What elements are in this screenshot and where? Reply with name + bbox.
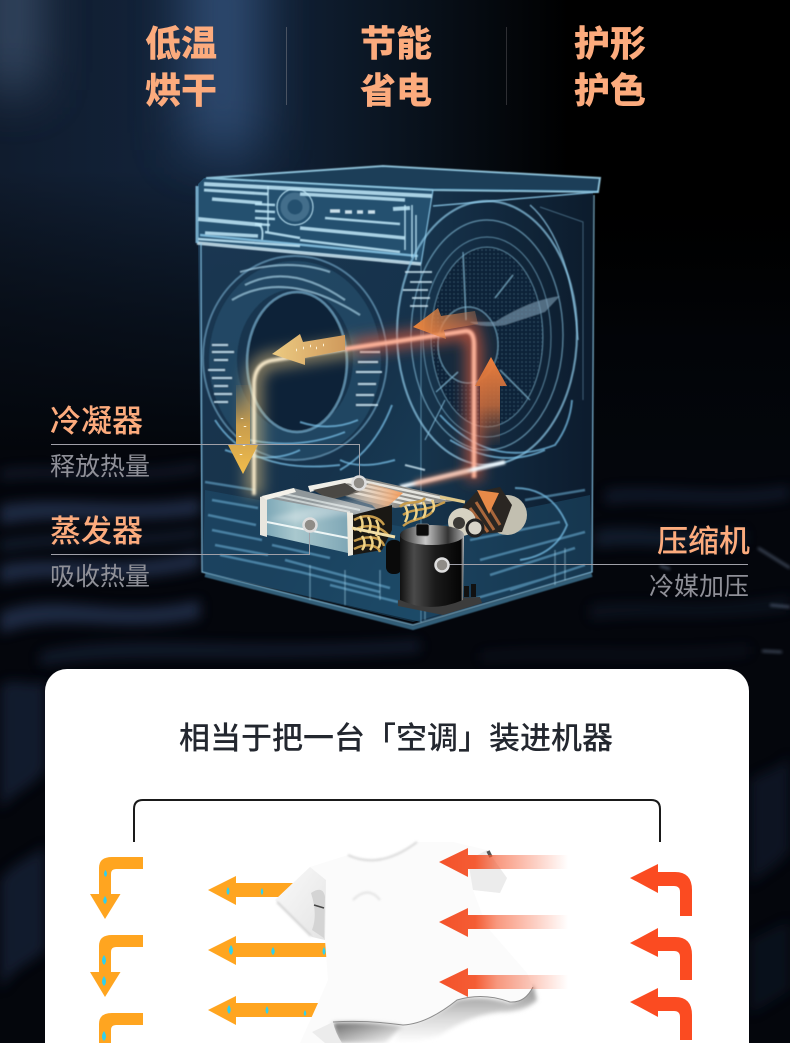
divider left — [286, 27, 287, 105]
airflow glow — [254, 330, 505, 495]
heading: low temp drying: 低温 — [145, 23, 217, 64]
base streaks — [205, 482, 585, 620]
label: condenser: 冷凝器 — [50, 404, 143, 439]
arrow: gold left — [272, 334, 345, 365]
t-shirt — [275, 842, 537, 1043]
door ring — [203, 256, 387, 460]
condenser — [308, 476, 463, 508]
arrow: orange up — [475, 357, 507, 445]
bracket — [134, 800, 660, 842]
heading: shape and colour care: 护色 — [574, 70, 646, 111]
compressor — [386, 524, 482, 615]
lower door and drum reflections — [215, 400, 572, 560]
water drops — [102, 870, 326, 1041]
arrow: orange left — [413, 308, 478, 339]
left sleeve — [275, 867, 326, 940]
heading: low temp drying — [145, 23, 217, 111]
heading: energy saving — [360, 23, 432, 111]
left elbow arrows — [90, 857, 143, 1043]
washer cabinet — [197, 166, 600, 628]
orange exit arrows — [208, 876, 330, 1025]
copper coils — [352, 497, 465, 552]
divider right — [506, 27, 507, 105]
drum — [397, 201, 583, 470]
label: compressor: 压缩机 — [657, 524, 750, 559]
motor / fan — [448, 487, 527, 536]
text: absorbs heat: 吸收热量 — [50, 563, 150, 591]
leader lines — [51, 444, 748, 564]
heading: energy saving: 省电 — [360, 70, 432, 111]
evaporator — [260, 483, 403, 556]
red elbow arrows — [630, 864, 692, 1040]
lower glowing band — [203, 490, 592, 622]
heading: low temp drying: 烘干 — [145, 70, 217, 111]
arrow: gold down — [228, 385, 258, 474]
heading: energy saving: 节能 — [360, 23, 432, 64]
marker dots — [304, 476, 448, 572]
heading: shape and colour care — [574, 23, 646, 111]
panel: white air-conditioner explanation — [45, 669, 749, 1043]
text: releases heat: 释放热量 — [50, 453, 150, 481]
right sleeve — [468, 850, 507, 893]
panel heading: 相当于把一台「空调」装进机器 — [179, 721, 613, 756]
text: refrigerant pressurised: 冷媒加压 — [649, 573, 749, 601]
hem inner shade — [333, 1022, 403, 1043]
label: evaporator: 蒸发器 — [50, 514, 143, 549]
control panel streaks — [198, 184, 432, 260]
heading: shape and colour care: 护形 — [574, 23, 646, 64]
red entry arrows — [439, 848, 568, 997]
